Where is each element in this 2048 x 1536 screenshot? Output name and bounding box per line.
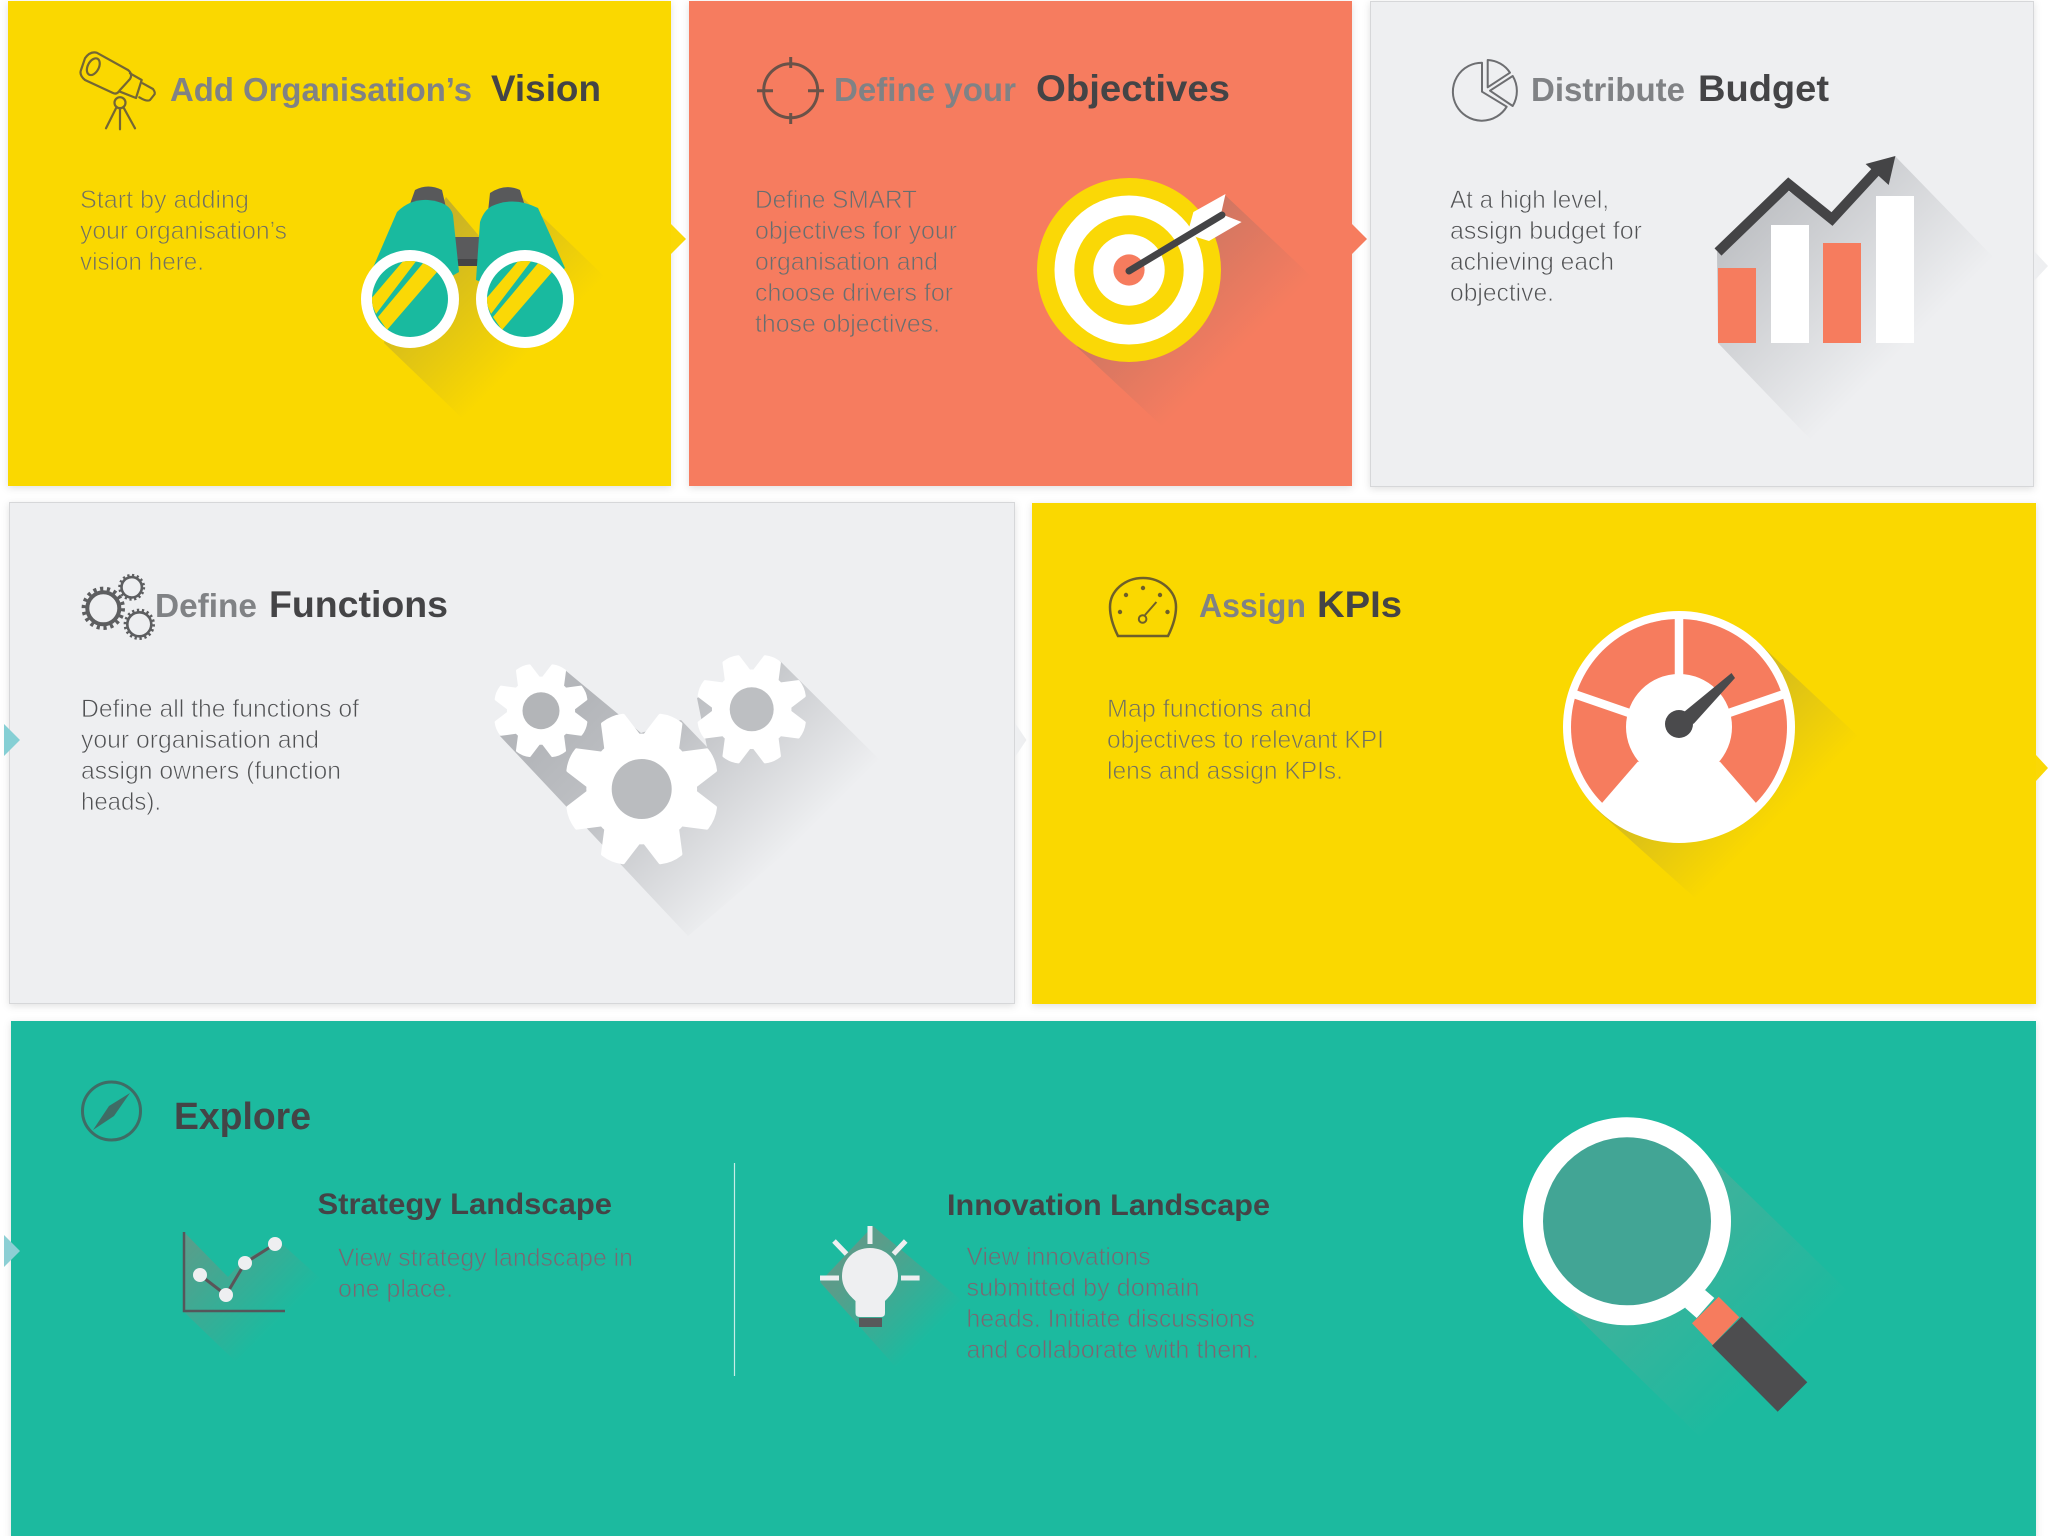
long shadow (500, 661, 887, 936)
description text: assign budget for (1450, 217, 1642, 245)
panel background (10, 502, 1014, 1004)
description text: choose drivers for (755, 279, 953, 307)
description text: vision here. (80, 248, 204, 276)
panel: define your objectives (689, 1, 1367, 486)
illustration: binoculars (361, 186, 586, 400)
long shadow (1717, 156, 1996, 440)
description text: one place. (338, 1275, 453, 1303)
panel background (1032, 503, 2036, 1004)
description text: objective. (1450, 279, 1554, 307)
heading: strategy landscape: Strategy Landscape (318, 1188, 612, 1221)
heading: objectives: Objectives (1036, 68, 1230, 109)
description text: View strategy landscape in (338, 1244, 633, 1272)
icon: telescope (80, 52, 155, 129)
heading: innovation landscape: Innovation Landscape (947, 1189, 1270, 1222)
description text (755, 186, 957, 338)
bridge (454, 237, 480, 259)
description text (81, 695, 359, 816)
connector arrow (1352, 224, 1367, 254)
connector arrow (4, 1235, 20, 1267)
description text: submitted by domain (966, 1274, 1200, 1302)
panel: assign kpis (1032, 503, 2048, 1004)
heading: explore: Explore (174, 1096, 311, 1138)
gauge dividers (1574, 618, 1784, 714)
illustration: bar chart with rising arrow (1717, 156, 1996, 440)
description text: achieving each (1450, 248, 1614, 276)
illustration: target with arrow (1037, 178, 1312, 428)
icon: cogs (84, 575, 154, 639)
heading: kpis: KPIs (1317, 584, 1402, 625)
connector arrow (2036, 755, 2048, 781)
gear: large (565, 712, 719, 866)
section: strategy landscape (184, 1188, 633, 1363)
handle collar (1692, 1297, 1739, 1345)
heading: budget: Budget (1698, 68, 1829, 109)
panel: define functions (4, 502, 1026, 1004)
panel background (8, 1, 671, 486)
description text: heads). (81, 788, 161, 816)
eyepieces (410, 186, 525, 212)
description text: View innovations (966, 1243, 1150, 1271)
description text (1107, 695, 1384, 785)
gear: right (696, 654, 807, 765)
description text: At a high level, (1450, 186, 1609, 214)
icon: light bulb (820, 1226, 961, 1372)
description text: organisation and (755, 248, 938, 276)
left lens (361, 250, 459, 348)
long shadow (384, 197, 605, 420)
panel: add organisation's vision (8, 1, 686, 486)
heading: functions: Functions (269, 584, 448, 625)
rising arrow (1718, 167, 1880, 252)
description text: those objectives. (755, 310, 940, 338)
description text (966, 1243, 1259, 1364)
barrels (372, 200, 459, 300)
description text: assign owners (function (81, 757, 341, 785)
arrow shaft (1129, 215, 1222, 271)
divider (734, 1163, 736, 1376)
connector arrow (2034, 251, 2048, 281)
description text: objectives to relevant KPI (1107, 726, 1384, 754)
illustration: gears (493, 654, 887, 936)
description text: Define SMART (755, 186, 917, 214)
description text: Define all the functions of (81, 695, 359, 723)
description text: and collaborate with them. (966, 1336, 1259, 1364)
section: innovation landscape (820, 1189, 1270, 1372)
long shadow (1597, 645, 1859, 898)
description text (1450, 186, 1642, 307)
illustration: gauge (1563, 611, 1840, 882)
description text: heads. Initiate discussions (966, 1305, 1255, 1333)
panel background (689, 1, 1352, 486)
lens (1533, 1127, 1721, 1315)
bars (1718, 268, 1756, 343)
arrow feathers (1189, 194, 1242, 241)
heading: define: Define (155, 587, 257, 624)
connector arrow in (4, 724, 20, 756)
icon: speedometer (1110, 578, 1176, 636)
heading: distribute: Distribute (1531, 71, 1685, 108)
description text: your organisation and (81, 726, 319, 754)
handle grip (1712, 1317, 1807, 1412)
heading: add organisation's: Add Organisation’s (170, 71, 472, 108)
description text: Map functions and (1107, 695, 1312, 723)
description text: lens and assign KPIs. (1107, 757, 1343, 785)
description text (80, 186, 287, 276)
handle neck (1685, 1290, 1714, 1318)
icon: crosshair (757, 57, 824, 124)
gauge needle (1665, 710, 1693, 738)
heading: vision: Vision (491, 68, 601, 109)
icon: line chart (184, 1232, 322, 1363)
panel: explore (4, 1021, 2036, 1536)
connector arrow out (1015, 723, 1026, 757)
panel: distribute budget (1370, 2, 2048, 486)
description text: your organisation’s (80, 217, 287, 245)
icon: pie chart (1453, 60, 1517, 121)
description text: objectives for your (755, 217, 957, 245)
long shadow (1570, 1160, 1850, 1440)
long shadow (1077, 195, 1312, 428)
right lens (476, 250, 574, 348)
heading: define your: Define your (834, 71, 1016, 108)
illustration: magnifying glass (1533, 1127, 1850, 1440)
panel background (1370, 2, 2034, 486)
icon: compass (82, 1082, 140, 1140)
gauge dial (1563, 611, 1795, 843)
description text: Start by adding (80, 186, 249, 214)
connector arrow (671, 224, 686, 254)
description text (338, 1244, 633, 1303)
target rings (1037, 178, 1221, 362)
heading: assign: Assign (1199, 587, 1306, 624)
gear: left (493, 663, 589, 758)
panel background (11, 1021, 2036, 1536)
